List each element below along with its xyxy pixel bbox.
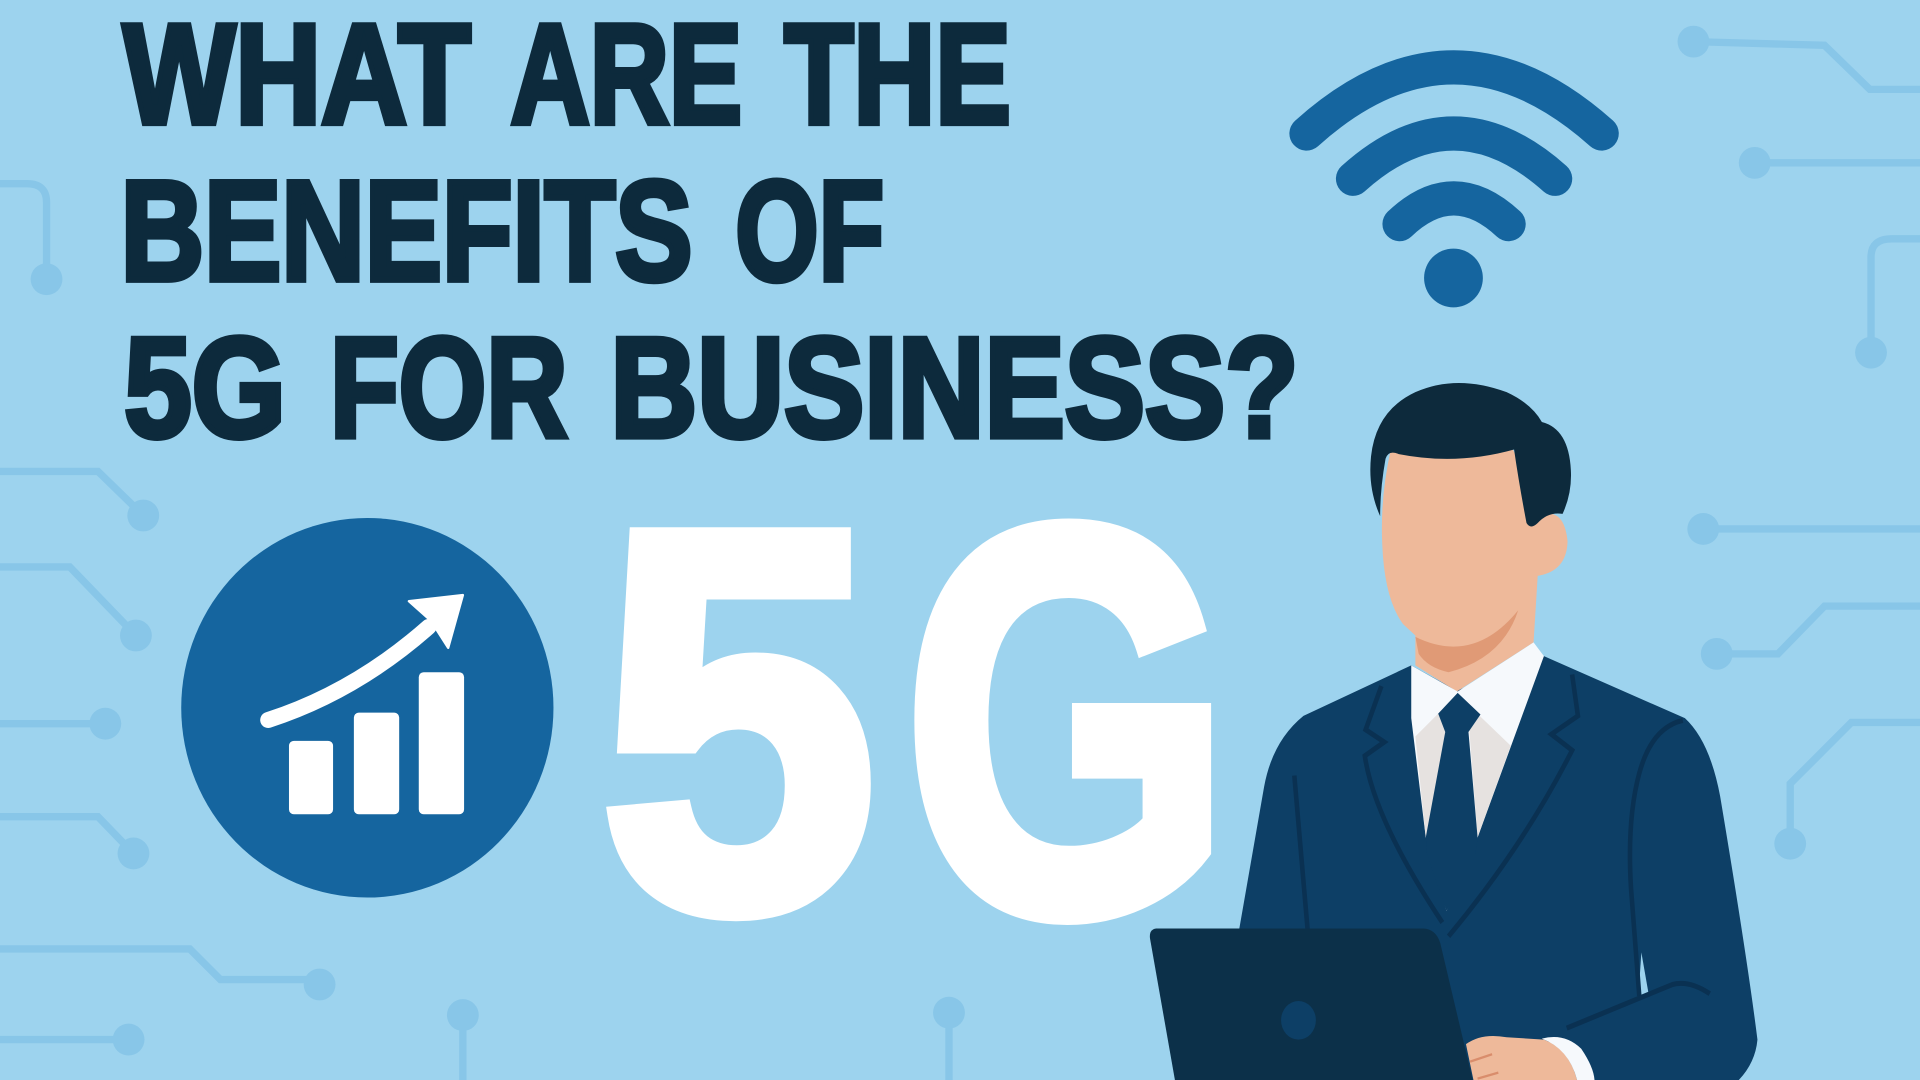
title: FOR <box>330 309 568 468</box>
icon: wifi signal <box>1307 67 1602 307</box>
laptop logo <box>1281 1001 1316 1040</box>
icon: growth chart badge <box>181 518 553 898</box>
title <box>121 0 1299 468</box>
shirt shadow <box>1415 714 1511 838</box>
title: OF <box>735 152 884 311</box>
finger lines <box>1470 1054 1498 1079</box>
neck shadow <box>1415 610 1518 672</box>
title: 5G <box>124 309 286 468</box>
shirt cuff <box>1542 1037 1595 1080</box>
large 5G label: 5 <box>600 419 877 1022</box>
large 5G label: G <box>904 413 1231 1028</box>
title: BENEFITS <box>121 152 692 311</box>
necktie <box>1426 693 1480 911</box>
gap between arm and torso <box>1638 952 1648 996</box>
shirt collar and front <box>1411 642 1544 911</box>
hand <box>1466 1036 1577 1080</box>
businessman illustration <box>1150 383 1757 1080</box>
large 5G label <box>600 413 1231 1028</box>
hair <box>1370 383 1571 526</box>
neck and head skin <box>1382 450 1568 692</box>
suit jacket <box>1239 656 1757 1080</box>
title: BUSINESS? <box>610 309 1299 468</box>
laptop <box>1150 928 1473 1080</box>
suit lines <box>1294 675 1710 1028</box>
